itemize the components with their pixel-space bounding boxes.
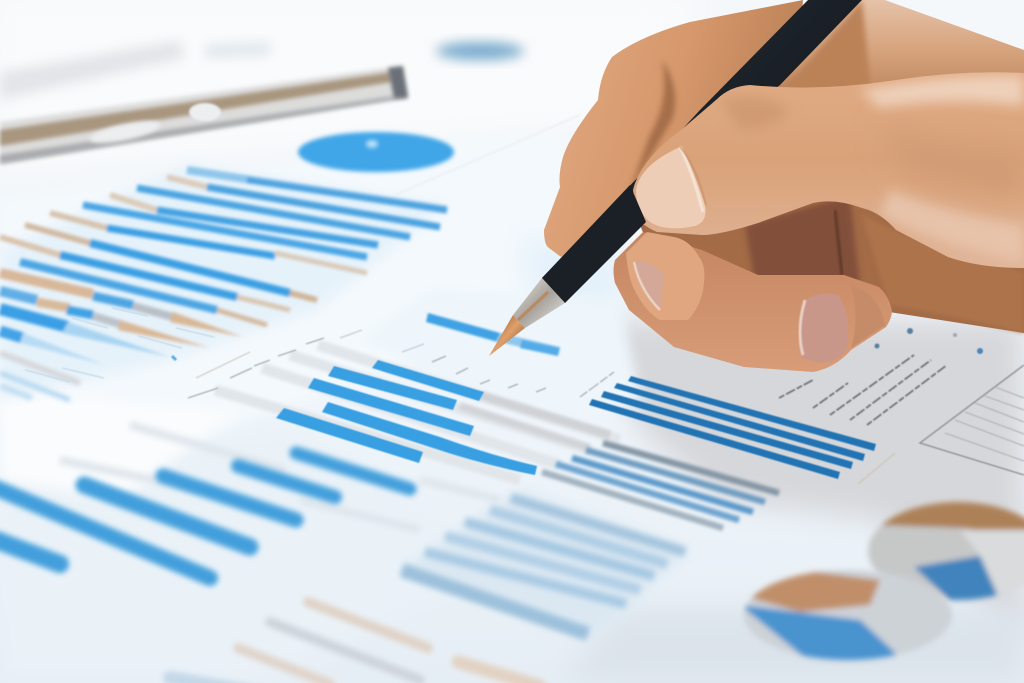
- bar chart: upper-table bar by the nib: [426, 313, 560, 356]
- hand: index finger shadow: [628, 60, 675, 195]
- hand: index finger: [544, 0, 803, 257]
- bar chart: muted blue-grey bars: [542, 443, 779, 528]
- bar chart: sharp dark blue bars: [589, 376, 876, 479]
- pen: copper nib: [489, 315, 525, 356]
- hand: back of hand and palm: [640, 0, 1024, 333]
- icon: blurred blue spot at top: [436, 42, 524, 60]
- pen: black barrel: [542, 0, 862, 303]
- table: outlined box lower right: [858, 365, 1024, 484]
- hand: middle finger with nail: [614, 232, 892, 372]
- hand: ring fingertip with nail: [626, 232, 704, 320]
- bar chart: faint stripes among foreground bars: [60, 425, 500, 530]
- chart background: pale blue haze behind upper-left bars: [0, 165, 447, 400]
- bar chart: bottom blurred tan and grey bars: [170, 602, 540, 683]
- hand: finger section behind the pen: [775, 0, 872, 100]
- icon: small dots near the fingers: [874, 328, 983, 354]
- text block: table headers in central chart: [188, 330, 614, 398]
- pen: lower barrel below the thumb: [542, 185, 646, 303]
- pie chart: lower right: [740, 565, 952, 670]
- bar chart: central sharp blue bars: [276, 360, 537, 475]
- chart background: pale blue haze behind pale bars: [400, 490, 690, 640]
- pie chart: upper right: [868, 490, 1024, 610]
- bar chart: foreground blurred blue bars: [0, 453, 410, 578]
- bar chart: pale blurred blue bars: [402, 498, 685, 634]
- hand: thumb: [633, 72, 1024, 268]
- text block: small print at right of the page: [779, 355, 947, 425]
- pen: silver grip: [513, 278, 565, 328]
- bar chart: upper left blurred bars: [0, 170, 447, 365]
- table rows: central chart grey stripes: [215, 345, 620, 480]
- blurred pen lying on the desk: [0, 40, 408, 164]
- pie chart: blue top ellipse: [298, 132, 454, 172]
- bar chart: far-left faint bars: [0, 353, 80, 400]
- small labels: upper-left chart captions: [25, 308, 214, 382]
